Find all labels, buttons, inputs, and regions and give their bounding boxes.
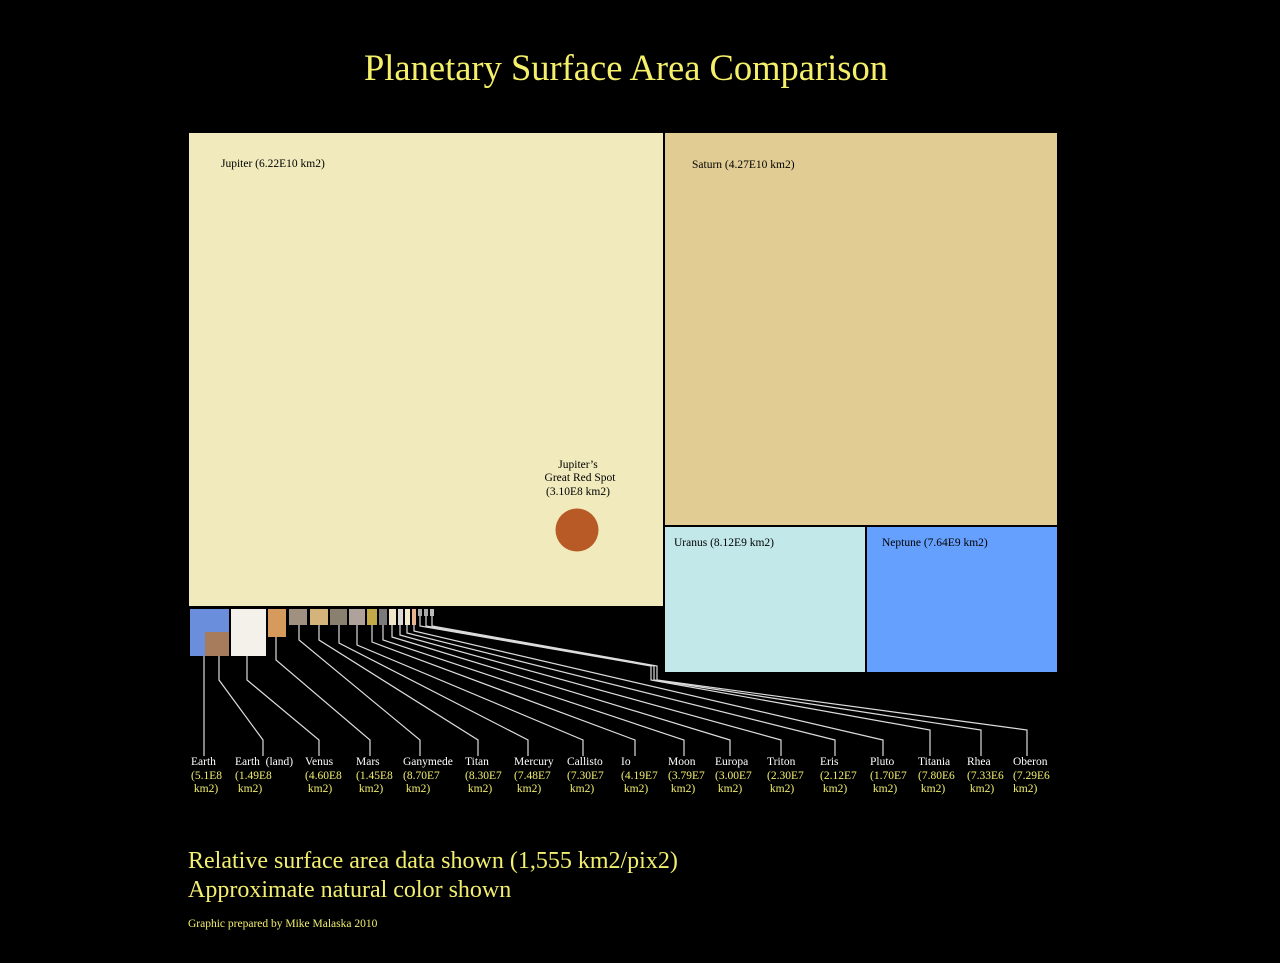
text: Triton: [767, 756, 795, 768]
text: Io: [621, 756, 631, 768]
text: Eris: [820, 756, 839, 768]
text: Earth (land): [235, 756, 293, 768]
text: km2): [194, 783, 218, 795]
text: Ganymede: [403, 756, 453, 768]
text: Mars: [356, 756, 380, 768]
Great Red Spot: Jupiter’s: [558, 459, 598, 471]
labels row: [191, 756, 1050, 795]
text: km2): [359, 783, 383, 795]
Great Red Spot: [545, 459, 616, 552]
text: km2): [718, 783, 742, 795]
credit: Graphic prepared by Mike Malaska 2010: [188, 918, 377, 930]
panel: Uranus: [665, 527, 865, 672]
Great Red Spot: (3.10E8 km2): [546, 486, 610, 498]
panel: Neptune: Neptune (7.64E9 km2): [882, 537, 988, 549]
panel: Uranus: Uranus (8.12E9 km2): [674, 537, 774, 549]
text: (4.19E7: [621, 770, 658, 782]
Great Red Spot: Great Red Spot: [545, 472, 616, 484]
text: (7.80E6: [918, 770, 955, 782]
text: Oberon: [1013, 756, 1048, 768]
text: km2): [517, 783, 541, 795]
text: km2): [671, 783, 695, 795]
leader lines: [204, 616, 1027, 756]
footnote text: Relative surface area data shown (1,555 km2/pix2): [188, 848, 678, 874]
text: Callisto: [567, 756, 603, 768]
text: km2): [468, 783, 492, 795]
panel: Saturn: Saturn (4.27E10 km2): [692, 159, 795, 171]
text: Earth: [191, 756, 216, 768]
text: (3.00E7: [715, 770, 752, 782]
text: km2): [970, 783, 994, 795]
text: (2.12E7: [820, 770, 857, 782]
footnote text: [188, 848, 678, 903]
text: km2): [308, 783, 332, 795]
text: km2): [238, 783, 262, 795]
text: (1.70E7: [870, 770, 907, 782]
text: Pluto: [870, 756, 894, 768]
footnote text: Approximate natural color shown: [188, 877, 511, 903]
text: (7.30E7: [567, 770, 604, 782]
text: (2.30E7: [767, 770, 804, 782]
small bodies squares: [190, 609, 434, 656]
text: Mercury: [514, 756, 554, 768]
panel: Jupiter: [189, 133, 663, 606]
panel: Neptune: [867, 527, 1057, 672]
text: (1.49E8: [235, 770, 272, 782]
text: (5.1E8: [191, 770, 222, 782]
text: (4.60E8: [305, 770, 342, 782]
text: (8.30E7: [465, 770, 502, 782]
text: Moon: [668, 756, 695, 768]
text: km2): [570, 783, 594, 795]
text: (7.48E7: [514, 770, 551, 782]
text: (8.70E7: [403, 770, 440, 782]
text: km2): [1013, 783, 1037, 795]
text: (7.29E6: [1013, 770, 1050, 782]
text: km2): [624, 783, 648, 795]
text: km2): [406, 783, 430, 795]
text: (3.79E7: [668, 770, 705, 782]
text: km2): [823, 783, 847, 795]
text: Titan: [465, 756, 489, 768]
panel: Saturn: [665, 133, 1057, 525]
text: Europa: [715, 756, 748, 768]
panel: Jupiter: Jupiter (6.22E10 km2): [221, 158, 325, 170]
text: (1.45E8: [356, 770, 393, 782]
text: km2): [770, 783, 794, 795]
text: Venus: [305, 756, 333, 768]
text: (7.33E6: [967, 770, 1004, 782]
title: Planetary Surface Area Comparison: [364, 47, 888, 88]
text: km2): [873, 783, 897, 795]
text: Titania: [918, 756, 950, 768]
text: Rhea: [967, 756, 991, 768]
text: km2): [921, 783, 945, 795]
